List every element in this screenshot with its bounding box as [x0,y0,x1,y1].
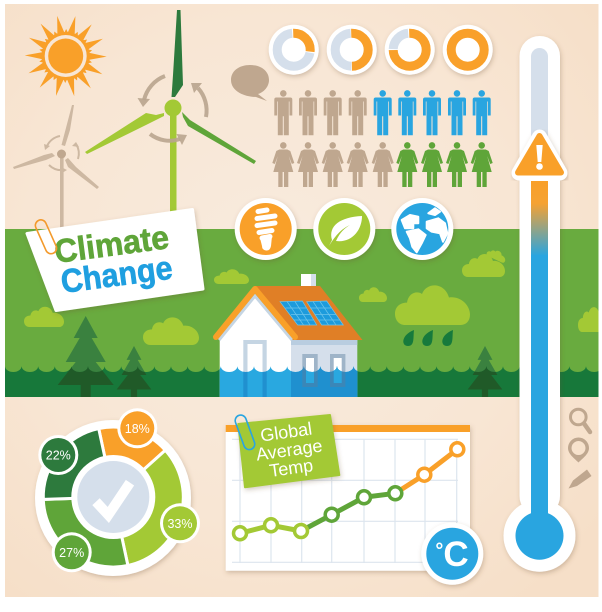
card: Climate Change title [27,210,203,310]
roof [255,286,362,340]
windows [302,354,345,387]
chimney [301,274,316,299]
heading: Climate: Climate [52,218,171,270]
donut: 75 percent [385,25,435,75]
clouds [24,247,602,345]
pie chart [35,408,200,576]
women pictogram row [272,142,493,187]
icon: celsius badge: C [443,535,469,574]
segment: 22 percent [43,428,105,499]
center check badge [71,455,155,539]
rain drops [403,330,453,346]
men pictogram row [274,90,491,135]
flood water [220,366,358,397]
thermometer [504,36,576,572]
icon: sun [25,15,107,97]
line chart panel [226,425,470,571]
badge: 18% [117,408,157,448]
icon: orange paperclip [34,218,58,255]
icon: celsius badge [421,523,483,585]
note: Global Average Temp: Global [259,419,313,446]
badge: 27%: 27% [59,546,84,560]
icon: map pin [568,438,589,462]
data line [240,449,457,533]
segment: 33 percent [122,450,183,566]
icon: warning triangle [518,136,561,173]
dark water wave [5,366,602,397]
front wall [220,297,291,397]
trees above waterline [66,316,496,372]
large wind turbine [85,10,256,214]
roof edge [216,289,295,337]
solar panels [280,301,343,325]
badge: 33%: 33% [167,517,193,531]
icon: celsius badge: ° [435,540,443,562]
icon: globe [391,198,453,260]
note: Global Average Temp: Temp [268,455,314,481]
trees below waterline [58,366,502,397]
donut: 25 percent [269,25,319,75]
side wall [291,340,357,397]
landscape band [5,229,602,397]
badge: 33% [160,503,200,543]
house [213,274,362,397]
note: Global Average Temp [234,414,339,487]
icon: magnifier [570,409,590,432]
segment: 27 percent [43,498,128,567]
speech bubble [231,65,269,101]
badge: 22%: 22% [46,448,71,462]
segment: 18 percent [99,427,165,470]
donut: 50 percent [327,25,377,75]
badge: 27% [52,532,92,572]
door [243,340,267,397]
note: Global Average Temp: Average [255,436,324,465]
donut: 100 percent [443,25,493,75]
donut charts row [269,25,493,75]
icon: blue paperclip [234,414,256,451]
badge: 22% [38,435,78,475]
icon: leaf [313,198,375,260]
icon: pencil [568,470,592,488]
data points [234,443,464,540]
badge: 18%: 18% [125,422,150,436]
heading: Change: Change [59,249,174,300]
small wind turbine [13,105,99,231]
icon: light bulb [235,198,297,260]
